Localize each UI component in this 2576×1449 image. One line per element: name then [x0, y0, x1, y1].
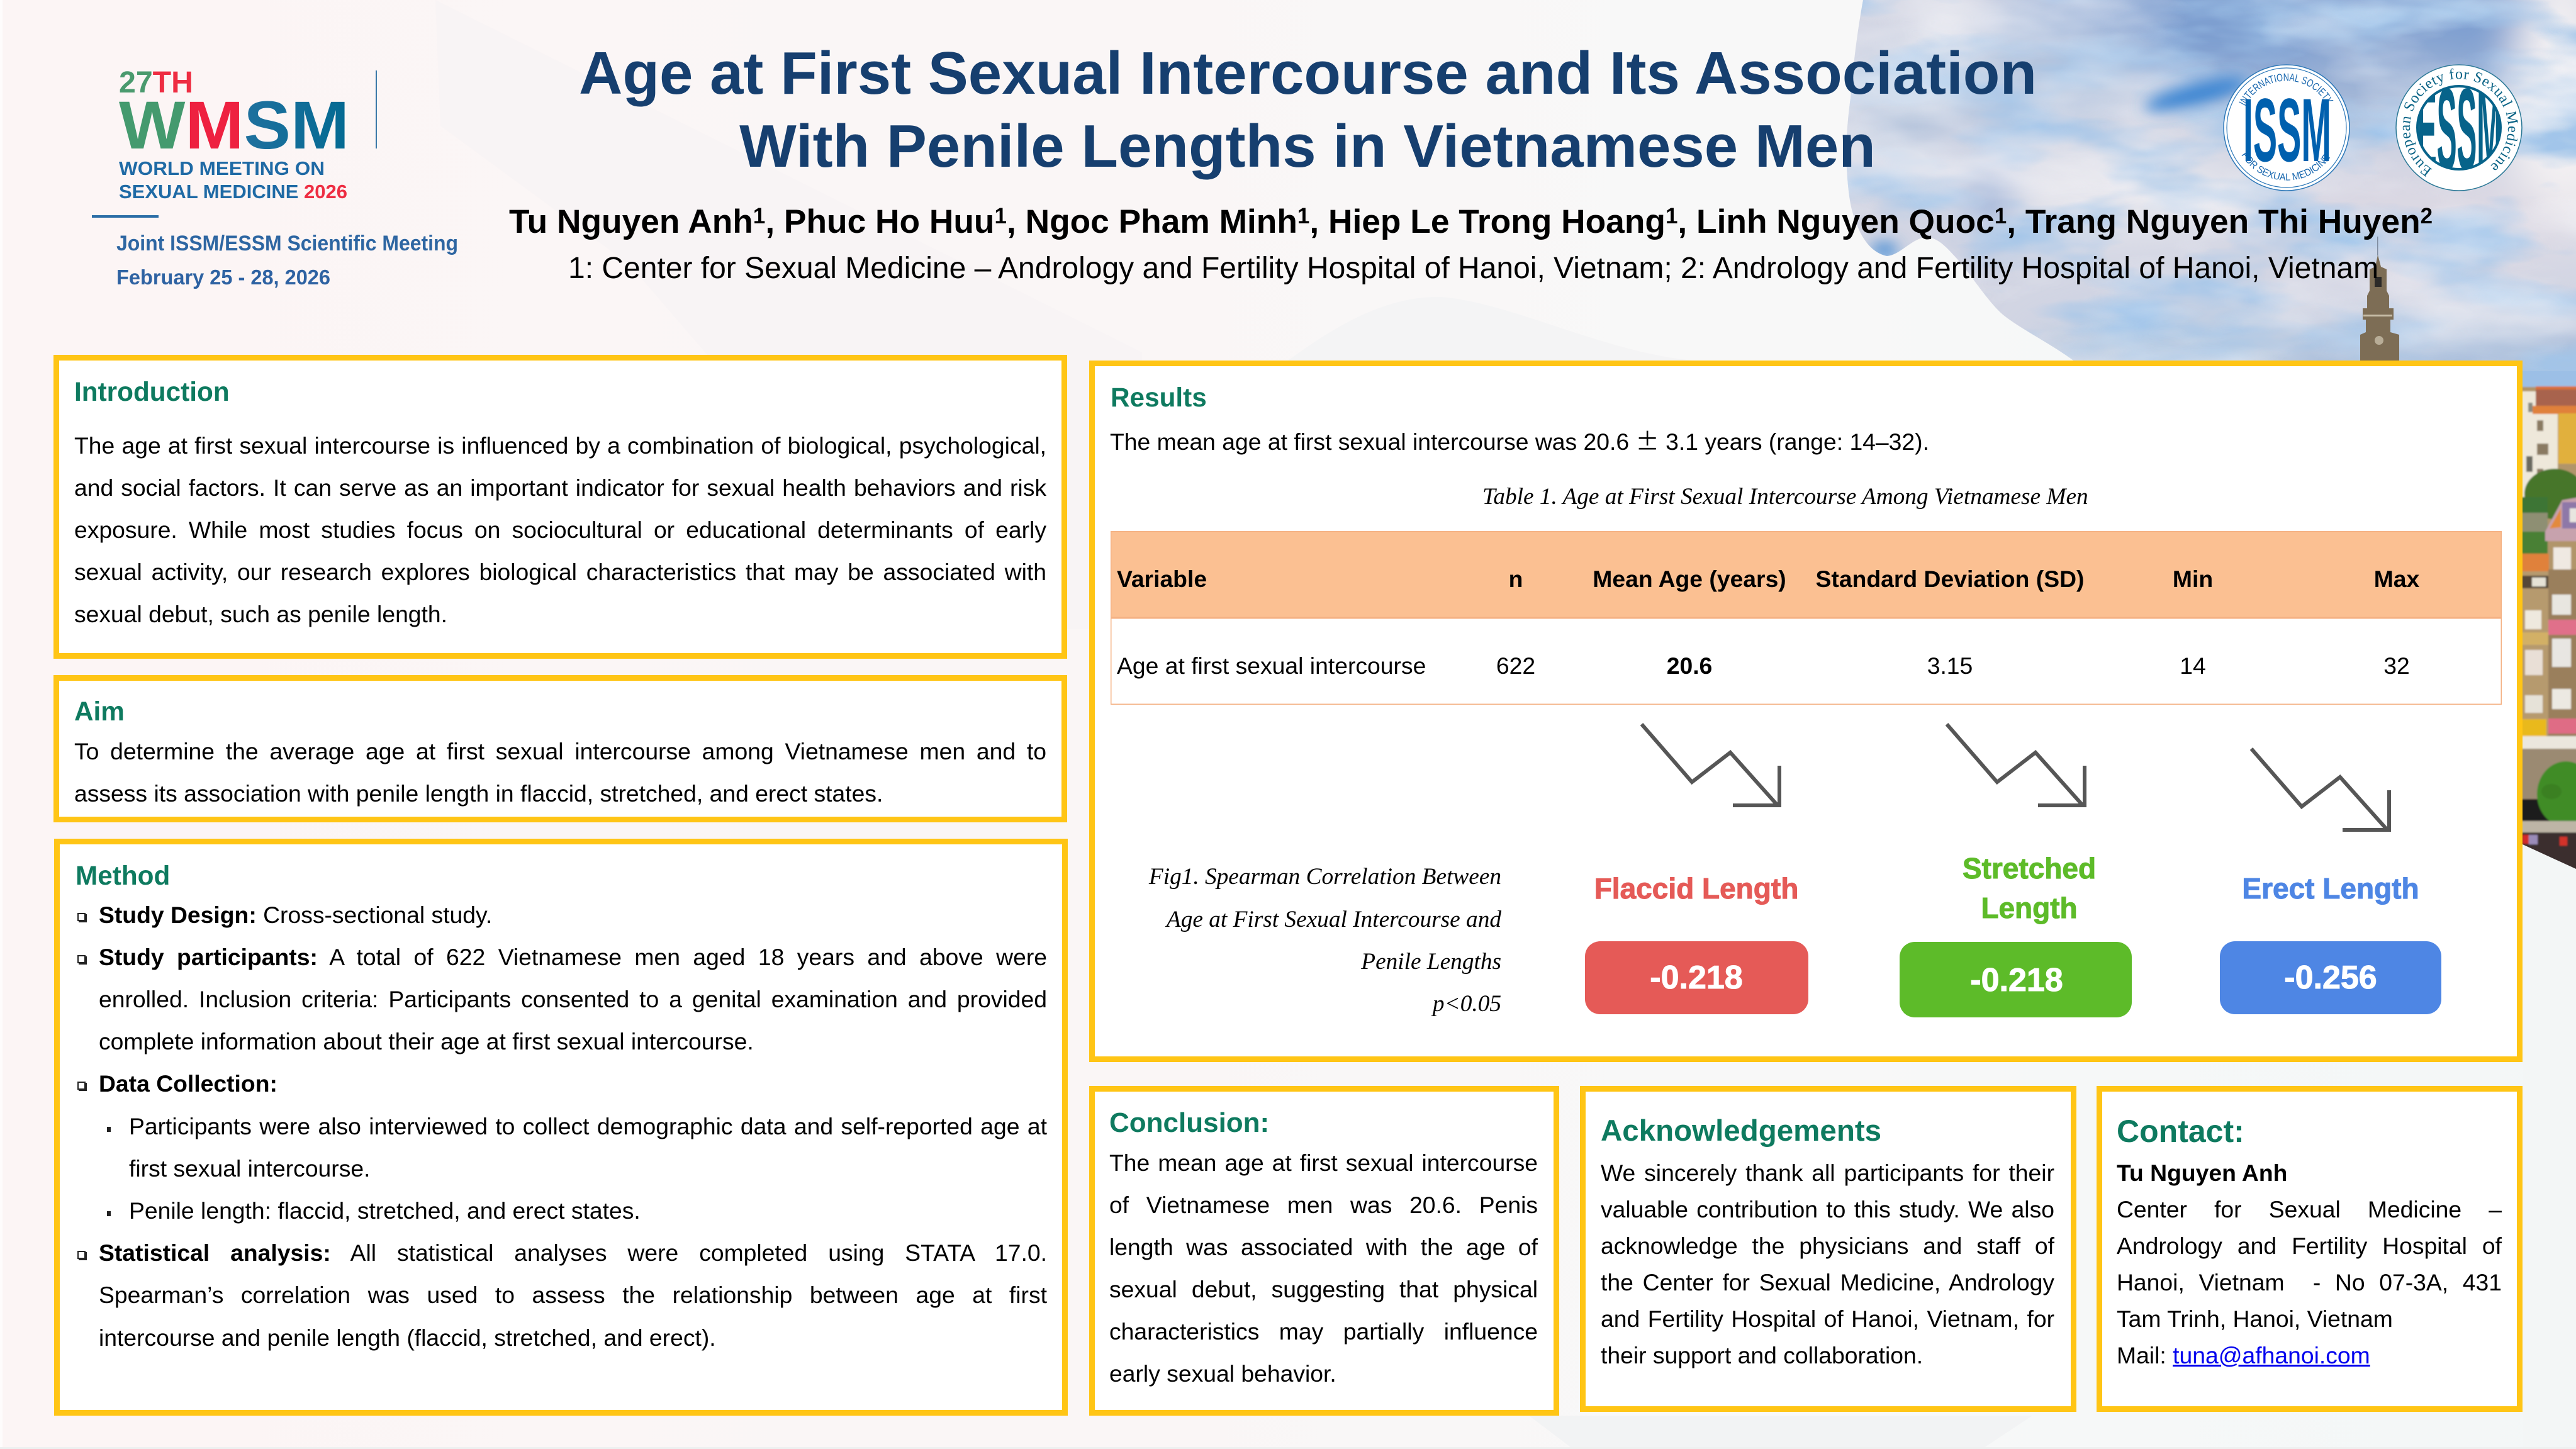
label: erect length: Erect Length	[2242, 872, 2419, 905]
method list	[77, 901, 1047, 1351]
figure caption: p<0.05	[1431, 991, 1501, 1017]
logo: ESSM: European Society for Sexual Medicine	[2402, 68, 2518, 177]
arrow: flaccid trend	[1642, 724, 1780, 807]
method list: Penile length: flaccid, stretched, and erect states.	[129, 1197, 641, 1224]
panel: aim	[53, 675, 1067, 822]
heading: method: Method	[76, 861, 170, 890]
table data row	[1111, 618, 2502, 705]
conclusion text: early sexual behavior.	[1109, 1360, 1336, 1387]
contact details: Andrology and Fertility Hospital of	[2117, 1233, 2502, 1259]
value: stretched correlation: -0.218	[1970, 962, 2063, 999]
table header row	[1111, 531, 2502, 618]
label: stretched length: Length	[1981, 892, 2078, 924]
acknowledgements text: the Center for Sexual Medicine, Andrology	[1601, 1269, 2054, 1295]
method list: first sexual intercourse.	[129, 1155, 370, 1182]
acknowledgements text: their support and collaboration.	[1601, 1342, 1923, 1368]
method list: Data Collection:	[99, 1070, 277, 1097]
label: flaccid length: Flaccid Length	[1594, 872, 1798, 905]
contact details: Hanoi, Vietnam - No 07-3A, 431	[2117, 1269, 2502, 1295]
logo line: sexual medicine 2026: SEXUAL MEDICINE 2026	[119, 181, 347, 203]
table data row: 14	[2180, 652, 2206, 678]
table data row: 20.6	[1667, 652, 1712, 678]
panel: conclusion	[1089, 1086, 1559, 1416]
contact details: Tu Nguyen Anh	[2117, 1160, 2287, 1186]
heading: aim: Aim	[74, 697, 125, 726]
value: flaccid correlation	[1585, 941, 1808, 1014]
table	[1111, 531, 2502, 705]
value: stretched correlation	[1900, 942, 2132, 1017]
method list: Study participants: A total of 622 Vietnamese men aged 18 years and above were	[99, 944, 1047, 970]
method list: enrolled. Inclusion criteria: Participants consented to a genital examination and provided	[99, 986, 1047, 1012]
table data row: 622	[1496, 652, 1535, 678]
aim text: To determine the average age at first sexual intercourse among Vietnamese men and to	[74, 737, 1046, 764]
method list: Spearman’s correlation was used to assess the relationship between age at first	[99, 1282, 1047, 1308]
title: With Penile Lengths in Vietnamese Men	[739, 113, 1876, 180]
logo line: world meeting on: WORLD MEETING ON	[119, 157, 325, 179]
acknowledgements text: We sincerely thank all participants for their	[1601, 1160, 2054, 1186]
introduction text: and social factors. It can serve as an important indicator for sexual health behaviors and risk	[74, 474, 1046, 501]
panel: contact	[2097, 1086, 2523, 1412]
heading: introduction: Introduction	[74, 377, 230, 406]
value: flaccid correlation: -0.218	[1650, 959, 1743, 996]
contact details: Mail: tuna@afhanoi.com	[2117, 1342, 2370, 1368]
introduction text: The age at first sexual intercourse is influenced by a combination of biological, psychological,	[74, 432, 1046, 458]
table header row: Max	[2374, 565, 2419, 591]
figure caption: Fig1. Spearman Correlation Between	[1148, 864, 1501, 890]
logo line: date: February 25 - 28, 2026	[116, 266, 330, 289]
value: erect correlation: -0.256	[2284, 959, 2377, 996]
tower	[2360, 237, 2399, 361]
acknowledgements text	[1601, 1160, 2055, 1368]
heading: acknowledgements: Acknowledgements	[1601, 1114, 1881, 1148]
conclusion text	[1109, 1149, 1538, 1387]
conclusion text: sexual debut, suggesting that physical	[1109, 1276, 1538, 1302]
contact details: Tam Trinh, Hanoi, Vietnam	[2117, 1306, 2393, 1332]
heading: conclusion: Conclusion:	[1109, 1107, 1269, 1138]
table data row: 3.15	[1927, 652, 1973, 678]
logo edition: 27TH: 27TH	[119, 66, 193, 99]
aim text: assess its association with penile length in flaccid, stretched, and erect states.	[74, 780, 883, 807]
photo of riverside buildings	[2520, 369, 2576, 878]
logo: ISSM: INTERNATIONAL SOCIETY	[2239, 73, 2333, 106]
acknowledgements text: valuable contribution to this study. We also	[1601, 1196, 2054, 1222]
table header row: Standard Deviation (SD)	[1816, 565, 2084, 591]
panel: method	[54, 839, 1068, 1416]
figure caption: Age at First Sexual Intercourse and	[1165, 907, 1501, 932]
arrow: stretched trend	[1947, 724, 2085, 807]
label: stretched length: Stretched	[1963, 852, 2096, 885]
conclusion text: characteristics may partially influence	[1109, 1318, 1538, 1344]
contact details	[2117, 1160, 2502, 1368]
title	[579, 40, 2037, 180]
logo: ISSM: FOR SEXUAL MEDICINE	[2241, 152, 2330, 181]
background with sky photo, buildings and logos: ISSM	[2243, 81, 2331, 181]
results summary: The mean age at first sexual intercourse was 20.6 ± 3.1 years (range: 14–32).	[1110, 423, 1929, 457]
method list: intercourse and penile length (flaccid, stretched, and erect).	[99, 1324, 716, 1351]
value: erect correlation	[2220, 941, 2441, 1014]
figure caption: Penile Lengths	[1360, 949, 1501, 975]
logo wordmark: WMSM: WMSM	[119, 87, 349, 163]
table caption: Table 1. Age at First Sexual Intercourse Among Vietnamese Men	[1482, 484, 2088, 510]
affiliations: 1: Center for Sexual Medicine – Andrology and Fertility Hospital of Hanoi, Vietnam; 2: Andrology and Fertility Hospital of Hanoi, Vietnam	[568, 252, 2378, 285]
introduction text	[74, 432, 1046, 627]
conclusion text: of Vietnamese men was 20.6. Penis	[1109, 1192, 1538, 1218]
acknowledgements text: acknowledge the physicians and staff of	[1601, 1233, 2054, 1259]
authors: Tu Nguyen Anh1, Phuc Ho Huu1, Ngoc Pham Minh1, Hiep Le Trong Hoang1, Linh Nguyen Quoc1, Trang Nguyen Thi Huyen2	[509, 203, 2433, 240]
acknowledgements text: and Fertility Hospital of Hanoi, Vietnam, for	[1601, 1306, 2054, 1332]
sky photo	[1825, 0, 2576, 403]
title: Age at First Sexual Intercourse and Its Association	[579, 40, 2037, 107]
conclusion text: length was associated with the age of	[1109, 1233, 1538, 1260]
panel: acknowledgements	[1580, 1086, 2076, 1412]
introduction text: exposure. While most studies focus on sociocultural or educational determinants of early	[74, 517, 1046, 543]
heading: contact: Contact:	[2117, 1114, 2244, 1149]
method list: Statistical analysis: All statistical analyses were completed using STATA 17.0.	[99, 1239, 1047, 1266]
panel: results	[1089, 361, 2523, 1062]
figure: correlation results	[1148, 723, 2441, 1017]
introduction text: sexual debut, such as penile length.	[74, 601, 447, 627]
conclusion text: The mean age at first sexual intercourse	[1109, 1149, 1538, 1175]
figure caption	[1148, 864, 1501, 1017]
logo line: joint meeting: Joint ISSM/ESSM Scientific Meeting	[116, 232, 458, 255]
table data row: 32	[2383, 652, 2410, 678]
method list: Study Design: Cross-sectional study.	[99, 901, 492, 927]
table header row: Variable	[1117, 565, 1207, 591]
method list: Participants were also interviewed to collect demographic data and self-reported age at	[129, 1113, 1047, 1139]
panel: introduction	[53, 355, 1067, 659]
table data row: Age at first sexual intercourse	[1117, 652, 1426, 678]
table header row: Min	[2173, 565, 2213, 591]
table header row: n	[1509, 565, 1523, 591]
contact details: Center for Sexual Medicine –	[2117, 1196, 2502, 1222]
table header row: Mean Age (years)	[1593, 565, 1786, 591]
introduction text: sexual activity, our research explores biological characteristics that may be associated with	[74, 559, 1046, 585]
method list: complete information about their age at first sexual intercourse.	[99, 1028, 754, 1055]
logo: ISSM	[2223, 64, 2350, 191]
logo: 27th WMSM meeting	[116, 66, 458, 289]
heading: results: Results	[1111, 383, 1207, 411]
aim text	[74, 737, 1046, 807]
arrow: erect trend	[2251, 749, 2390, 832]
